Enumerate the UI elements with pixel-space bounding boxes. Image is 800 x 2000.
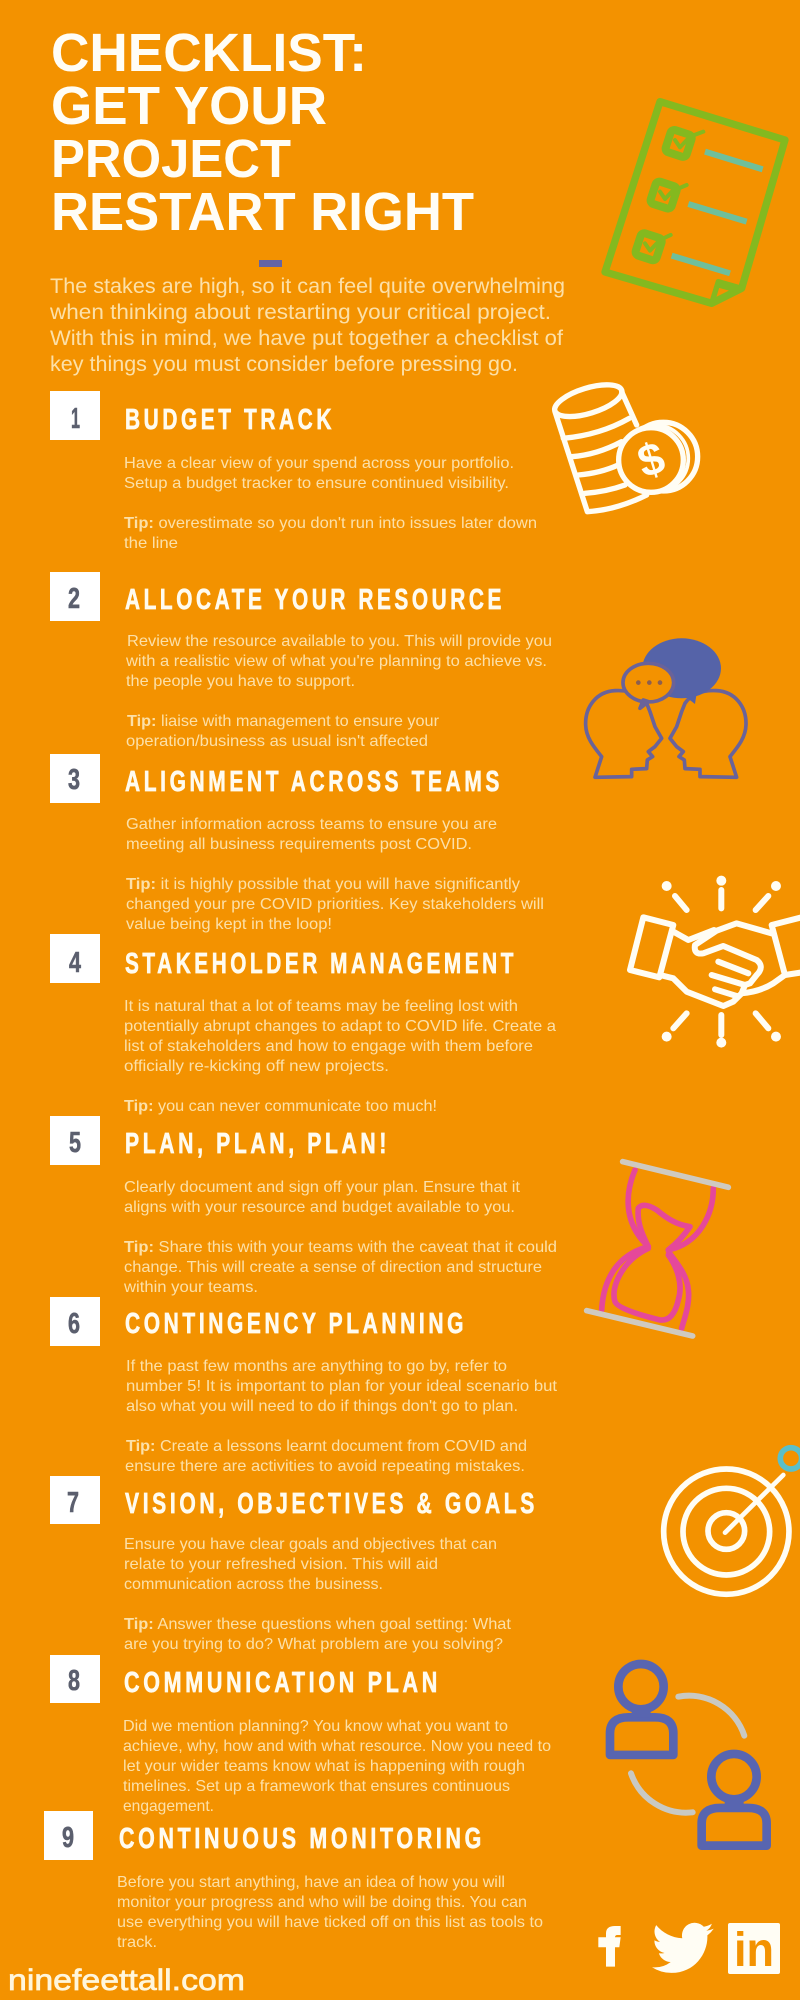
title: RESTART RIGHT [51, 182, 474, 242]
body 2: the people you have to support. [126, 673, 355, 690]
panel: 3 alignment across teams [50, 754, 544, 933]
body 2: Tip: liaise with management to ensure your [127, 713, 440, 730]
panel: 4 stakeholder management [50, 934, 556, 1115]
panel: 5 plan plan plan [50, 1116, 557, 1296]
body 5: Tip: Share this with your teams with the caveat that it could [124, 1239, 557, 1256]
icon: hourglass [587, 1162, 728, 1336]
body 6: If the past few months are anything to go by, refer to [126, 1358, 507, 1375]
number 4: 4 [69, 947, 81, 979]
icon: coins [551, 378, 698, 512]
body 5: change. This will create a sense of direction and structure [124, 1259, 542, 1276]
panel: 9 continuous monitoring [44, 1811, 543, 1951]
heading 3: ALIGNMENT ACROSS TEAMS [125, 766, 503, 798]
icon: facebook [598, 1926, 621, 1967]
intro text: The stakes are high, so it can feel quite overwhelming [50, 275, 565, 298]
body 5: aligns with your resource and budget available to you. [124, 1199, 515, 1216]
number box 9 [44, 1811, 93, 1860]
body 8: achieve, why, how and with what resource. Now you need to [123, 1738, 551, 1755]
body 2 [125, 633, 552, 750]
body 7: relate to your refreshed vision. This will aid [124, 1556, 438, 1573]
body 3: value being kept in the loop! [126, 916, 332, 933]
body 9: use everything you will have ticked off on this list as tools to [117, 1914, 543, 1931]
body 4: It is natural that a lot of teams may be feeling lost with [124, 998, 518, 1015]
number box 6 [50, 1297, 100, 1346]
accent dash [259, 260, 282, 267]
heading 8: COMMUNICATION PLAN [124, 1667, 441, 1699]
icon: checklist [605, 102, 785, 303]
body 2: Review the resource available to you. This will provide you [127, 633, 552, 650]
number box 5 [50, 1116, 100, 1165]
icon: twitter [652, 1923, 714, 1973]
heading 6: CONTINGENCY PLANNING [125, 1308, 467, 1340]
panel: 6 contingency planning [50, 1297, 558, 1475]
body 4: list of stakeholders and how to engage with them before [124, 1038, 533, 1055]
heading 2: ALLOCATE YOUR RESOURCE [125, 584, 505, 616]
heading 7: VISION, OBJECTIVES & GOALS [125, 1488, 538, 1520]
title: CHECKLIST: [51, 23, 367, 83]
number 8: 8 [68, 1665, 80, 1697]
website footer: ninefeettall.com [8, 1964, 245, 1997]
body 7: are you trying to do? What problem are you solving? [124, 1636, 503, 1653]
icon: linkedin: in [734, 1924, 774, 1977]
intro text: when thinking about restarting your critical project. [49, 301, 551, 324]
body 3: Tip: it is highly possible that you will have significantly [126, 876, 520, 893]
title: GET YOUR [51, 76, 327, 136]
icon: two heads talking [586, 638, 746, 777]
number 6: 6 [68, 1308, 80, 1340]
body 1: the line [124, 535, 178, 552]
icon: target [664, 1448, 800, 1594]
number 3: 3 [68, 764, 80, 796]
intro text: With this in mind, we have put together a checklist of [50, 327, 563, 350]
body 4: officially re-kicking off new projects. [124, 1058, 389, 1075]
body 8: Did we mention planning? You know what you want to [123, 1718, 508, 1735]
body 2: with a realistic view of what you're planning to achieve vs. [125, 653, 547, 670]
icon: handshake [630, 879, 800, 1045]
body 7: Ensure you have clear goals and objectives that can [124, 1536, 497, 1553]
intro text: key things you must consider before pressing go. [50, 353, 518, 376]
body 9: track. [117, 1934, 157, 1951]
body 3: meeting all business requirements post COVID. [126, 836, 472, 853]
body 6: ensure there are activities to avoid repeating mistakes. [125, 1458, 525, 1475]
body 7: Tip: Answer these questions when goal setting: What [124, 1616, 512, 1633]
heading 5: PLAN, PLAN, PLAN! [125, 1128, 390, 1160]
body 4 [124, 998, 556, 1115]
body 5: within your teams. [123, 1279, 258, 1296]
body 2: operation/business as usual isn't affected [126, 733, 428, 750]
body 9 [117, 1874, 543, 1951]
body 6: also what you will need to do if things don't go to plan. [126, 1398, 518, 1415]
body 1: Setup a budget tracker to ensure continued visibility. [124, 475, 509, 492]
body 6: number 5! It is important to plan for your ideal scenario but [126, 1378, 558, 1395]
number box 2 [50, 572, 100, 621]
number 9: 9 [62, 1822, 74, 1854]
body 8: engagement. [123, 1798, 214, 1815]
heading 1: BUDGET TRACK [125, 404, 335, 436]
number box 8 [50, 1655, 100, 1703]
body 5 [123, 1179, 557, 1296]
number 5: 5 [69, 1127, 81, 1159]
number box 4 [50, 934, 100, 983]
number box 3 [50, 754, 100, 803]
title [51, 23, 474, 242]
body 3: Gather information across teams to ensure you are [126, 816, 497, 833]
panel: 2 allocate your resource [50, 572, 552, 750]
number 7: 7 [67, 1487, 79, 1519]
panel: 7 vision objectives goals [50, 1476, 538, 1653]
body 1: Have a clear view of your spend across your portfolio. [124, 455, 514, 472]
number 1: 1 [71, 403, 80, 435]
body 1: Tip: overestimate so you don't run into issues later down [124, 515, 537, 532]
body 8 [123, 1718, 551, 1815]
heading 9: CONTINUOUS MONITORING [119, 1823, 485, 1855]
body 4: Tip: you can never communicate too much! [124, 1098, 437, 1115]
panel: 1 budget track [50, 391, 537, 552]
body 9: monitor your progress and who will be doing this. You can [117, 1894, 527, 1911]
body 7: communication across the business. [124, 1576, 383, 1593]
number box 7 [50, 1476, 100, 1524]
body 5: Clearly document and sign off your plan. Ensure that it [124, 1179, 521, 1196]
icon: connected users [610, 1664, 767, 1846]
body 3 [126, 816, 544, 933]
body 6 [125, 1358, 558, 1475]
number box 1 [50, 391, 100, 440]
body 3: changed your pre COVID priorities. Key stakeholders will [126, 896, 544, 913]
icon glyph: dollar: $ [632, 431, 670, 488]
body 8: let your wider teams know what is happening with rough [123, 1758, 525, 1775]
panel: 8 communication plan [50, 1655, 551, 1815]
body 7 [124, 1536, 512, 1653]
body 1 [124, 455, 537, 552]
intro text [49, 275, 565, 376]
number 2: 2 [68, 583, 80, 615]
title: PROJECT [51, 129, 291, 189]
body 6: Tip: Create a lessons learnt document from COVID and [126, 1438, 527, 1455]
body 8: timelines. Set up a framework that ensures continuous [123, 1778, 510, 1795]
heading 4: STAKEHOLDER MANAGEMENT [125, 948, 517, 980]
body 4: potentially abrupt changes to adapt to COVID life. Create a [124, 1018, 556, 1035]
body 9: Before you start anything, have an idea of how you will [117, 1874, 505, 1891]
